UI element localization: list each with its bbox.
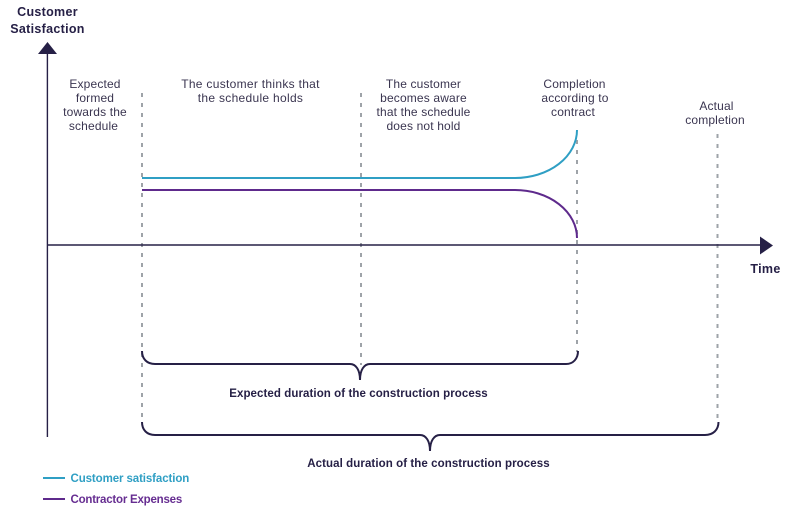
y-axis title: Satisfaction [10,22,85,36]
milestone label: expected formed: formed [76,91,114,105]
label: actual duration: Actual duration of the construction process [307,458,550,470]
milestone label: becomes aware: The customer [386,77,461,91]
milestone label: actual completion: completion [685,113,745,127]
milestone label: expected formed: towards the [63,105,127,119]
milestone guide lines [142,93,718,422]
x-axis arrow [47,236,773,254]
line: contractor expenses [142,190,577,238]
milestone label: actual completion: Actual [699,99,734,113]
line: customer satisfaction [142,130,577,178]
milestone label: expected formed: Expected [69,77,121,91]
milestone label: completion according to contract: contract [551,105,595,119]
legend: contractor expenses: Contractor Expenses [70,494,182,506]
milestone label: schedule holds: the schedule holds [198,91,303,105]
brace: expected duration [142,351,578,380]
milestone label: becomes aware: does not hold [386,119,461,133]
legend: customer satisfaction: Customer satisfaction [70,473,189,485]
milestone label: becomes aware: becomes aware [380,91,467,105]
y-axis title: Customer [17,5,78,19]
y-axis arrow [38,42,57,437]
milestone label: expected formed: schedule [69,119,118,133]
milestone label: schedule holds: The customer thinks that [181,77,320,91]
milestone label: completion according to contract: Completion [543,77,606,91]
milestone label: completion according to contract: according to [541,91,609,105]
x-axis title: Time [750,262,781,276]
brace: actual duration [142,422,718,451]
label: expected duration: Expected duration of the construction process [229,388,488,400]
milestone label: becomes aware: that the schedule [377,105,471,119]
